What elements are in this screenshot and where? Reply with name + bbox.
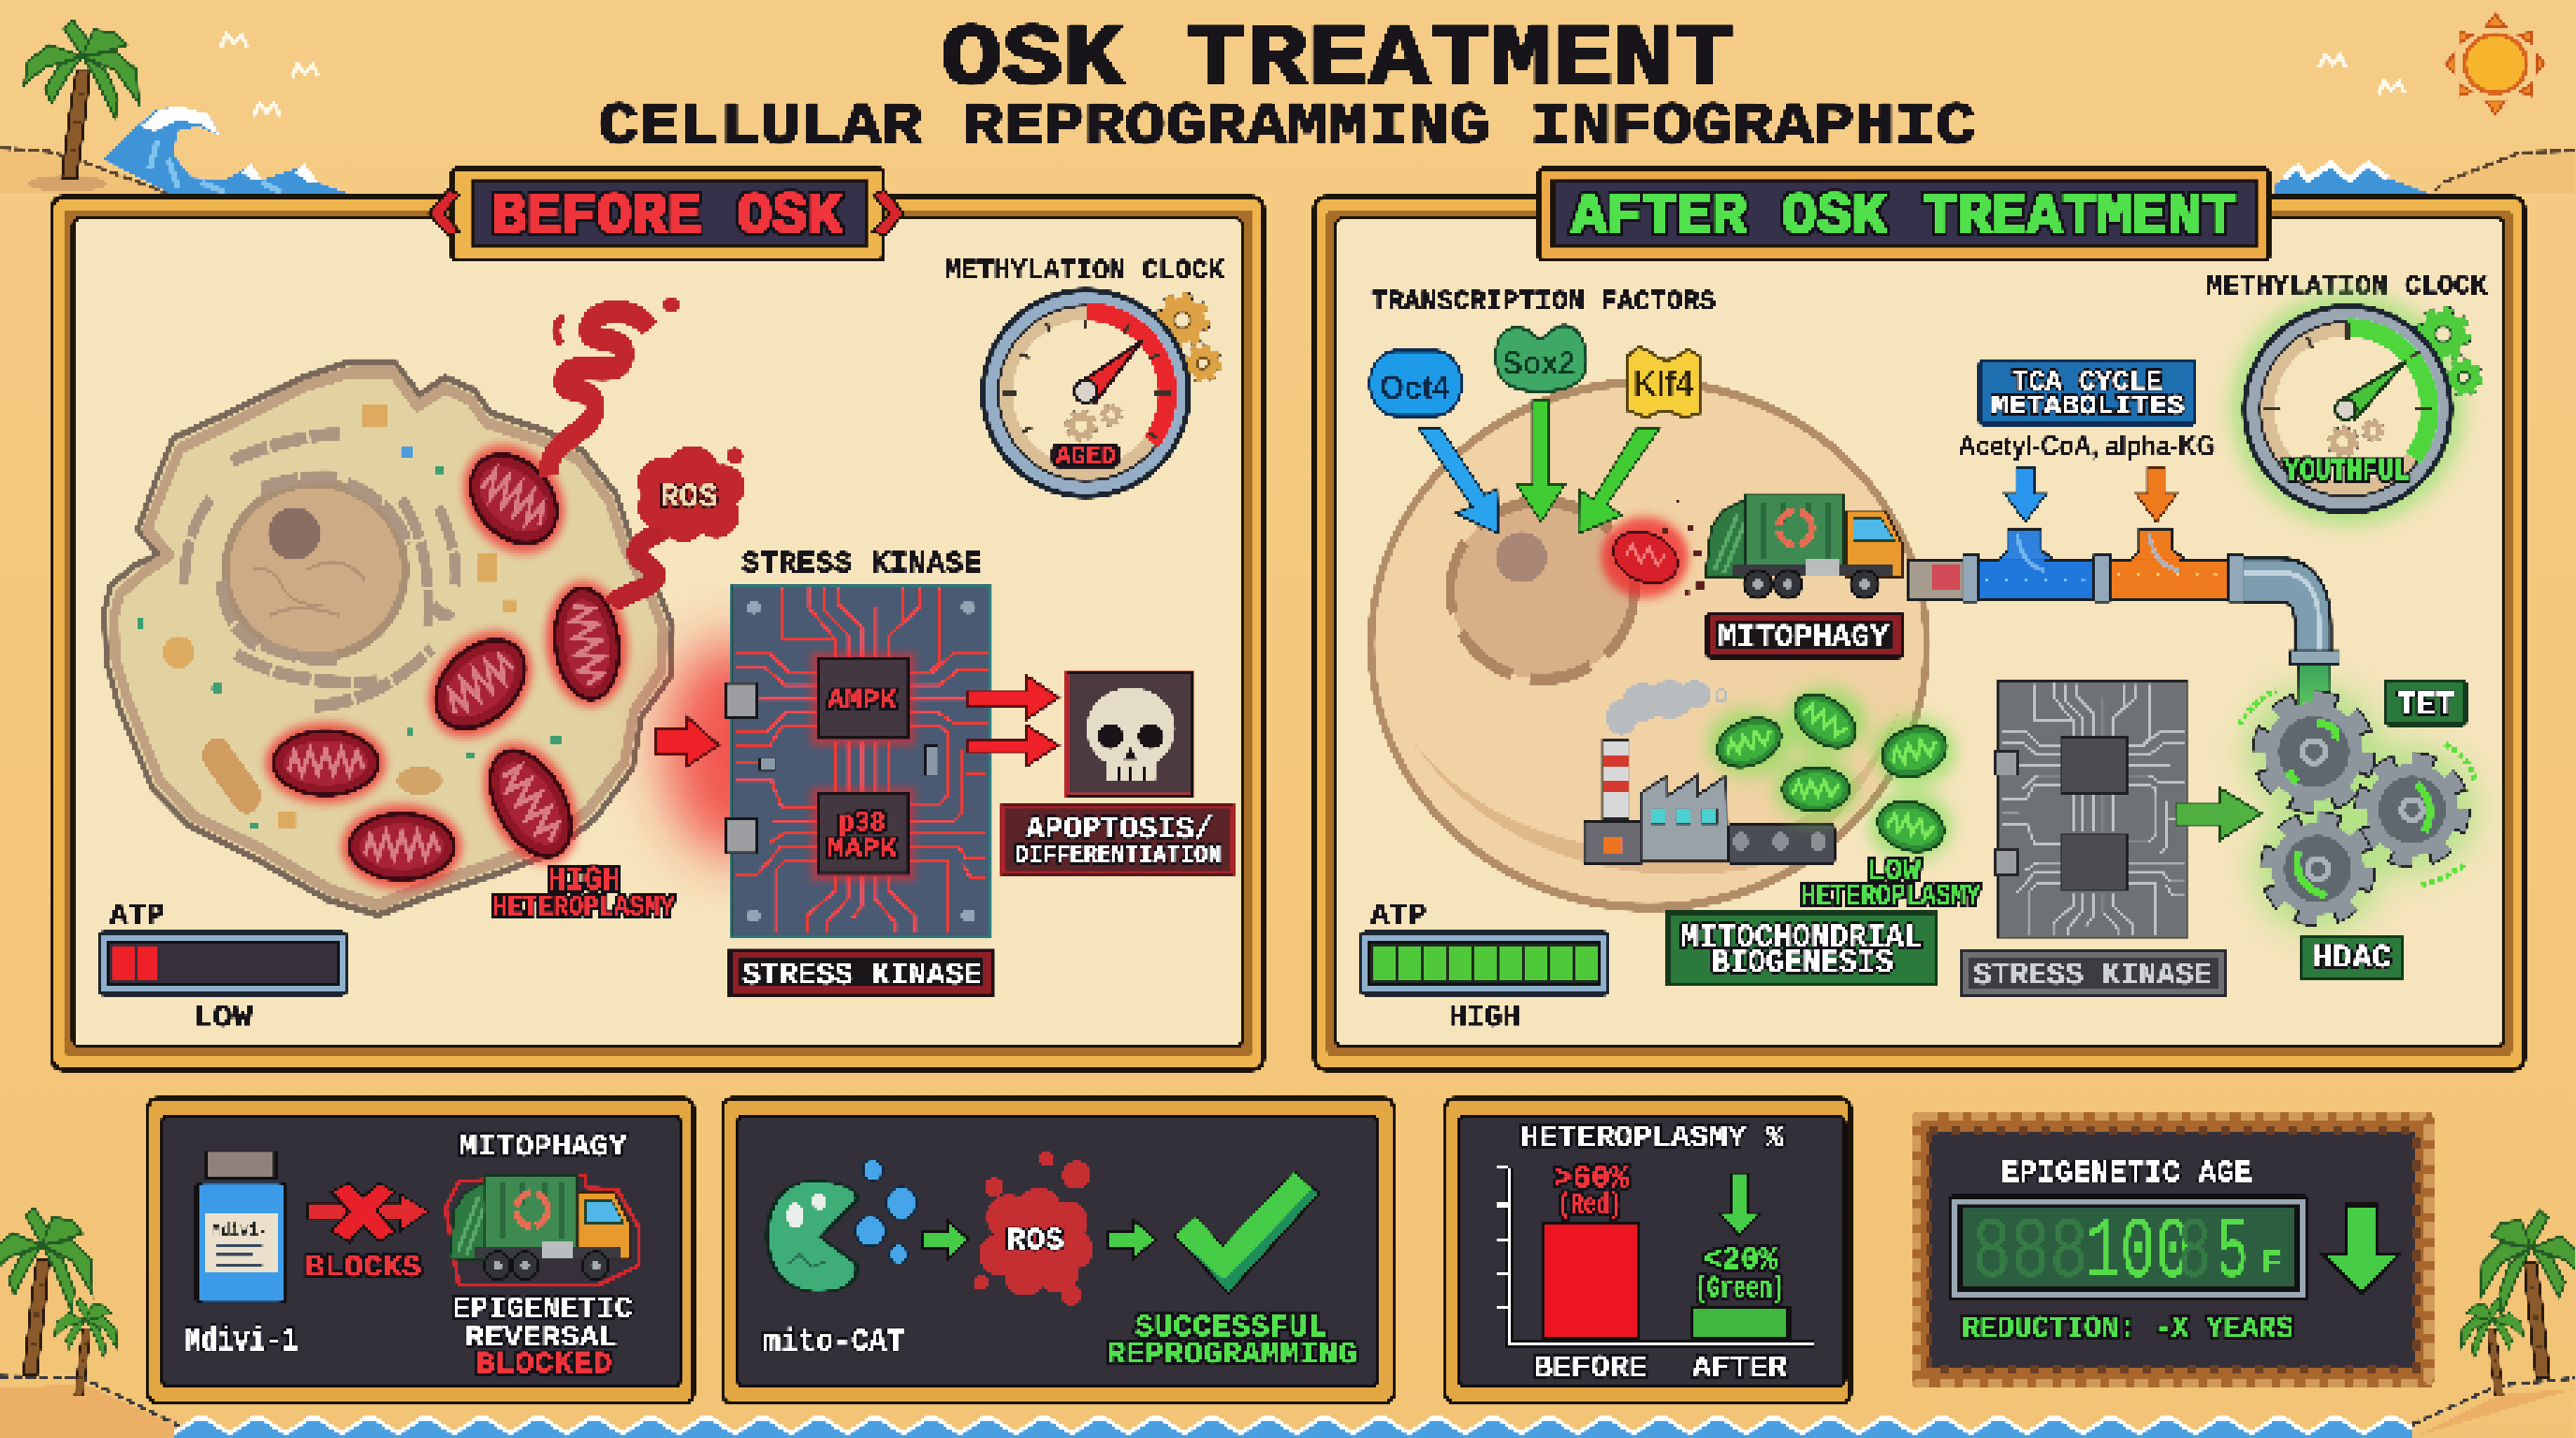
- label: low heteroplasmy: [1801, 854, 1982, 914]
- label: mitochondrial biogenesis: [1668, 913, 1936, 984]
- damaged mitochondrion being removed: [1601, 499, 1704, 598]
- icon: blocked garbage truck: [446, 1175, 638, 1284]
- label: successful reprogramming: SUCCESSFUL: [1134, 1311, 1327, 1345]
- icon: skull: [1067, 672, 1193, 796]
- label: TET: [2386, 681, 2466, 725]
- label: successful reprogramming: mito-CAT: [763, 1325, 904, 1359]
- bar chart: >60%: [1554, 1162, 1630, 1197]
- label: mitochondrial biogenesis: MITOCHONDRIAL: [1680, 919, 1923, 957]
- top-left beach with palm and wave: [0, 21, 353, 195]
- bottom palms right: [2411, 1211, 2576, 1438]
- methylation clock: aged: AGED: [1056, 443, 1116, 472]
- title: OSK TREATMENT: [941, 11, 1735, 110]
- heading: epigenetic age: EPIGENETIC AGE: [2001, 1156, 2252, 1191]
- birds top: [221, 35, 2405, 116]
- LCD display: [1950, 1196, 2307, 1302]
- methylation clock: aged: METHYLATION CLOCK: [944, 256, 1224, 287]
- stress kinase circuit board: STRESS KINASE: [741, 547, 982, 581]
- arrow: cell to stress kinase: [655, 641, 805, 857]
- label: successful reprogramming: [763, 1311, 1357, 1372]
- ATP gauge high: HIGH: [1449, 1001, 1520, 1035]
- label: stress kinase inactive: STRESS KINASE: [1973, 959, 2212, 994]
- chart title: HETEROPLASMY %: [1520, 1121, 1785, 1155]
- labels: mitophagy blocked text: BLOCKS: [305, 1251, 421, 1285]
- ATP gauge low: LOW: [193, 1001, 253, 1035]
- label: low heteroplasmy: LOW: [1866, 854, 1922, 888]
- methylation clock: youthful: [2206, 271, 2487, 526]
- label: metabolites list: Acetyl-CoA, alpha-KG: [1958, 431, 2216, 462]
- label: mitochondrial biogenesis: BIOGENESIS: [1711, 945, 1894, 982]
- methylation clock: youthful: METHYLATION CLOCK: [2206, 271, 2487, 303]
- panel: heteroplasmy chart: [1443, 1096, 1852, 1405]
- bar chart: [1496, 1162, 1813, 1386]
- labels: mitophagy blocked text: EPIGENETIC: [452, 1292, 633, 1327]
- ROS smoke and cloud: ROS: [660, 478, 718, 517]
- rejuvenated cell: [1371, 382, 1926, 907]
- label: apoptosis / differentiation: DIFFERENTIATION: [1015, 842, 1222, 871]
- icon: mito-CAT pac-man mitochondrion: [768, 1160, 916, 1292]
- bar chart: AFTER: [1692, 1351, 1787, 1386]
- arrow: age down: [2323, 1205, 2399, 1294]
- ATP gauge low: [99, 899, 346, 1035]
- bar chart: (Red): [1558, 1190, 1622, 1222]
- icon: blocked arrow with X: [307, 1182, 429, 1242]
- methylation clock: aged: [944, 256, 1224, 499]
- label: high heteroplasmy: [492, 861, 675, 924]
- label: HDAC: HDAC: [2313, 940, 2392, 977]
- label: low heteroplasmy: HETEROPLASMY: [1801, 879, 1982, 914]
- bottom palms left: [0, 1208, 179, 1438]
- water strip: [173, 1414, 2411, 1438]
- arrow: kinase to gears: [2176, 788, 2261, 840]
- label: mitophagy: MITOPHAGY: [1718, 621, 1890, 656]
- ATP gauge high: [1361, 899, 1608, 1035]
- stress kinase circuit board: [725, 547, 991, 936]
- icon: ROS cloud: [973, 1152, 1093, 1305]
- aged cell with damaged mitochondria: [104, 362, 672, 916]
- panel: Mdivi-1 blocks mitophagy: [146, 1096, 695, 1405]
- ROS smoke and cloud: [549, 298, 745, 606]
- icon: check mark: [1175, 1172, 1319, 1294]
- label: stress kinase: STRESS KINASE: [742, 959, 982, 994]
- labels: mitophagy blocked text: Mdivi-1: [185, 1322, 298, 1360]
- transcription factor blobs: Sox2: [1502, 345, 1575, 381]
- bar chart: <20%: [1704, 1243, 1778, 1279]
- label: high heteroplasmy: HIGH: [548, 861, 621, 900]
- LCD display: 8: [2177, 1204, 2211, 1302]
- transcription factor blobs: Klf4: [1633, 364, 1693, 403]
- label: transcription factors: TRANSCRIPTION FACTORS: [1371, 286, 1716, 318]
- labels: mitophagy blocked text: MITOPHAGY: [459, 1130, 628, 1165]
- panel: after OSK treatment: [1312, 167, 2526, 1072]
- panel: mito-CAT scavenges ROS: [721, 1096, 1396, 1405]
- garbage truck: mitophagy: [1705, 494, 1902, 598]
- LCD display: 5: [2217, 1204, 2248, 1302]
- top-right waves and beach: [2274, 150, 2576, 195]
- ATP gauge low: ATP: [110, 899, 165, 933]
- label: apoptosis / differentiation: APOPTOSIS/: [1026, 813, 1213, 847]
- LCD display: 888: [1972, 1204, 2088, 1302]
- labels: mitophagy blocked text: [185, 1130, 633, 1382]
- stress kinase circuit board: p38: [839, 808, 886, 840]
- panel: before OSK: [50, 167, 1266, 1072]
- panel: epigenetic age: [1911, 1111, 2434, 1388]
- ATP gauge high: ATP: [1370, 899, 1427, 933]
- labels: mitophagy blocked text: REVERSAL: [465, 1322, 618, 1355]
- transcription factor blobs: Oct4: [1380, 368, 1450, 406]
- methylation clock: youthful: YOUTHFUL: [2284, 454, 2409, 489]
- LCD display: 100: [2086, 1204, 2190, 1302]
- stress kinase circuit board: MAPK: [827, 835, 897, 864]
- bar chart: (Green): [1694, 1271, 1785, 1306]
- label: apoptosis / differentiation: [1003, 805, 1233, 874]
- transcription factor blobs: [1369, 326, 1700, 418]
- healthy green mitochondria: [1707, 683, 1956, 861]
- label: TET: TET: [2397, 686, 2454, 725]
- arrows: factors into nucleus: [1419, 400, 1660, 534]
- arrows: green: [922, 1220, 1156, 1259]
- label: TCA cycle metabolites: TCA CYCLE: [2012, 367, 2162, 399]
- factory and conveyor: mitochondrial biogenesis: [1584, 681, 1835, 864]
- label: TCA cycle metabolites: METABOLITES: [1991, 390, 2185, 423]
- label: high heteroplasmy: HETEROPLASMY: [492, 892, 675, 924]
- heading badge: before OSK: BEFORE OSK: [491, 183, 843, 250]
- label: TCA cycle metabolites: [1980, 361, 2195, 424]
- labels: mitophagy blocked text: BLOCKED: [476, 1347, 612, 1382]
- icon: Mdivi-1 vial: Mdivi-: [212, 1221, 268, 1242]
- heading badge: before OSK: [429, 167, 904, 262]
- heading badge: after OSK treatment: AFTER OSK TREATMENT: [1572, 183, 2237, 250]
- label: reduction: REDUCTION: -X YEARS: [1962, 1312, 2293, 1346]
- label: successful reprogramming: REPROGRAMMING: [1106, 1338, 1357, 1372]
- LCD display: F: [2261, 1245, 2282, 1284]
- icon: sun: [2446, 14, 2544, 114]
- subtitle: CELLULAR REPROGRAMMING INFOGRAPHIC: [598, 95, 1976, 162]
- icon: ROS cloud: ROS: [1006, 1224, 1064, 1258]
- arrows: kinase to apoptosis: [967, 676, 1059, 766]
- inactive stress kinase board: [1996, 682, 2188, 938]
- icon: Mdivi-1 vial: [197, 1152, 285, 1303]
- stress kinase circuit board: AMPK: [827, 685, 897, 717]
- metabolite pipeline: [1908, 528, 2339, 707]
- heading badge: after OSK treatment: [1537, 167, 2271, 262]
- gears: TET and HDAC enzymes: [2239, 684, 2476, 932]
- bar chart: BEFORE: [1533, 1351, 1647, 1386]
- arrows: metabolites into pipe: [2005, 467, 2177, 521]
